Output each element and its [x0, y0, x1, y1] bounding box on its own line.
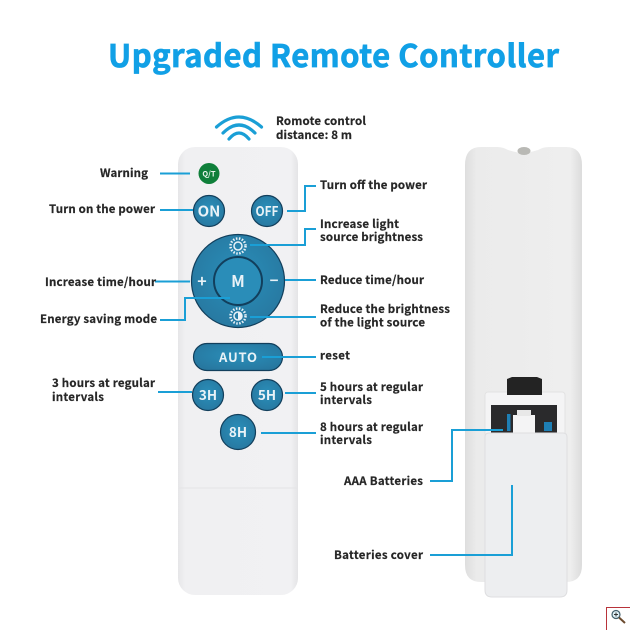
- label: 5 hours: [320, 379, 424, 408]
- label: 3 hours: intervals: [52, 389, 104, 405]
- label: warning: Warning: [100, 165, 148, 181]
- label: increase brightness: Increase light: [320, 216, 399, 232]
- label: increase time: Increase time/hour: [45, 274, 157, 290]
- panel: remote front: [178, 147, 298, 595]
- remote body: [178, 147, 298, 595]
- back body: [465, 147, 582, 582]
- control ring: +: [197, 268, 207, 292]
- IR window: [518, 147, 530, 155]
- button: Q/T: Q/T: [202, 168, 216, 180]
- button: 8H: [220, 414, 256, 450]
- battery cover: [485, 433, 567, 597]
- label: remote control distance: [276, 113, 366, 143]
- label: reduce brightness: Reduce the brightness: [320, 301, 450, 317]
- button: ON: ON: [198, 200, 220, 222]
- leader lines: [155, 174, 512, 555]
- label: increase brightness: source brightness: [320, 229, 423, 245]
- button: Q/T: [198, 163, 220, 184]
- label: 8 hours: intervals: [320, 432, 372, 448]
- panel: remote back: [465, 147, 582, 597]
- label: 5 hours: 5 hours at regular: [320, 379, 424, 395]
- title: Upgraded Remote Controller: [108, 31, 559, 76]
- icon: brightness up: [230, 238, 246, 254]
- label: 3 hours: 3 hours at regular: [52, 375, 156, 391]
- label: 5 hours: intervals: [320, 392, 372, 408]
- label: AAA batteries: AAA Batteries: [343, 473, 423, 489]
- button: OFF: [252, 196, 282, 226]
- button: 8H: 8H: [229, 421, 247, 441]
- label: reset: reset: [320, 348, 350, 364]
- button: AUTO: [194, 344, 282, 370]
- control ring: −: [270, 270, 279, 291]
- button: ON: [194, 196, 224, 226]
- label: turn on the power: Turn on the power: [49, 201, 156, 217]
- label: turn off the power: Turn off the power: [320, 177, 428, 193]
- button: AUTO: AUTO: [218, 347, 257, 366]
- icon: zoom magnifier: [606, 608, 630, 630]
- icon: brightness down: [230, 308, 246, 324]
- label: reduce time: Reduce time/hour: [320, 272, 425, 288]
- button: 3H: [192, 380, 224, 410]
- battery compartment: [491, 405, 557, 434]
- label: 8 hours: 8 hours at regular: [320, 419, 424, 435]
- label: 3 hours: [52, 375, 156, 405]
- icon: wireless signal: [216, 117, 262, 139]
- M button: [214, 257, 262, 305]
- battery bay lip: [485, 392, 565, 437]
- label: remote control distance: Romote control: [276, 113, 366, 129]
- label: reduce brightness: of the light source: [320, 314, 425, 330]
- button: 5H: 5H: [258, 384, 276, 404]
- button: 5H: [252, 380, 282, 410]
- control ring: [192, 234, 284, 328]
- label: energy saving mode: Energy saving mode: [40, 311, 157, 327]
- label: batteries cover: Batteries cover: [334, 547, 424, 563]
- release tab: [507, 377, 542, 395]
- label: increase brightness: [320, 216, 423, 245]
- label: 8 hours: [320, 419, 424, 448]
- label: remote control distance: distance: 8 m: [276, 127, 352, 143]
- button: 3H: 3H: [199, 384, 217, 404]
- button: OFF: OFF: [256, 200, 279, 220]
- control ring: M: [231, 268, 245, 292]
- label: reduce brightness: [320, 301, 450, 330]
